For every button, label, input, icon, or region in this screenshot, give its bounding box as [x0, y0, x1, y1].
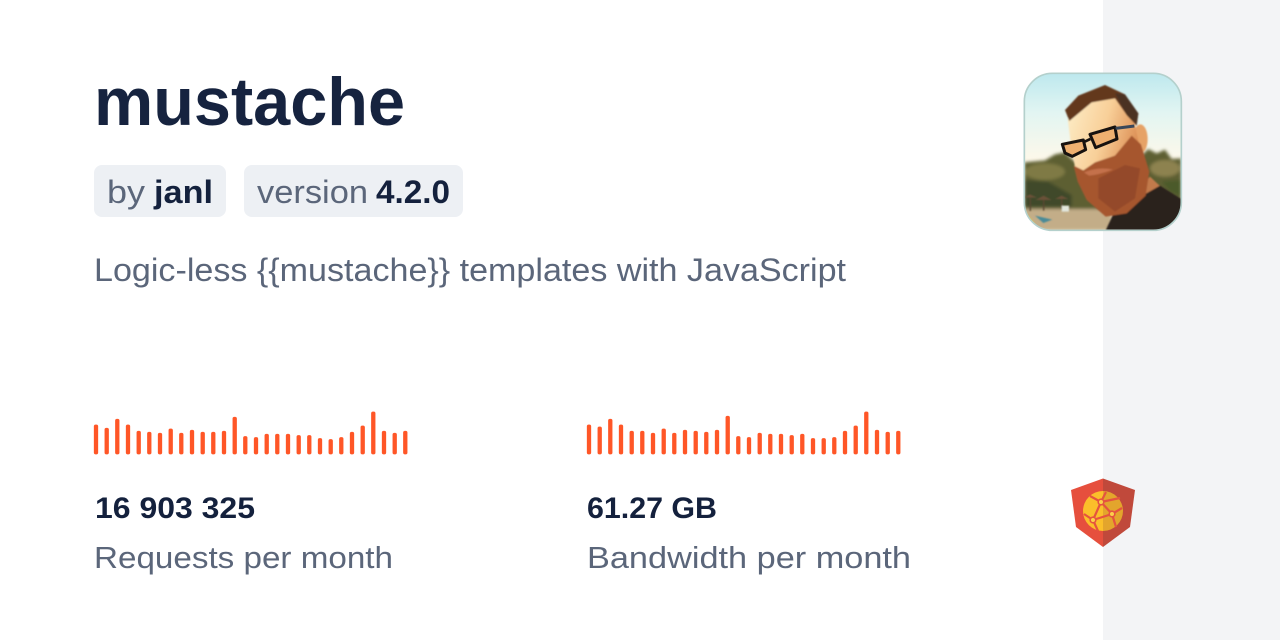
sidebar	[1103, 0, 1280, 640]
requests label: Requests per month	[94, 540, 393, 575]
avatar photo	[1024, 73, 1181, 230]
version pill	[244, 165, 463, 217]
author pill	[94, 165, 226, 217]
title: mustache	[94, 64, 405, 140]
author pill: by	[107, 174, 145, 210]
chart: bandwidth per month	[587, 412, 900, 454]
author pill: janl	[153, 174, 213, 210]
chart: requests per month	[94, 412, 407, 454]
version pill: 4.2.0	[376, 174, 450, 210]
bandwidth value: 61.27 GB	[587, 492, 717, 525]
bandwidth label: Bandwidth per month	[587, 540, 911, 575]
description: Logic-less {{mustache}} templates with JavaScript	[94, 252, 846, 288]
requests value: 16 903 325	[95, 492, 255, 525]
icon: shield with network globe	[1071, 478, 1135, 547]
version pill: version	[257, 174, 368, 210]
